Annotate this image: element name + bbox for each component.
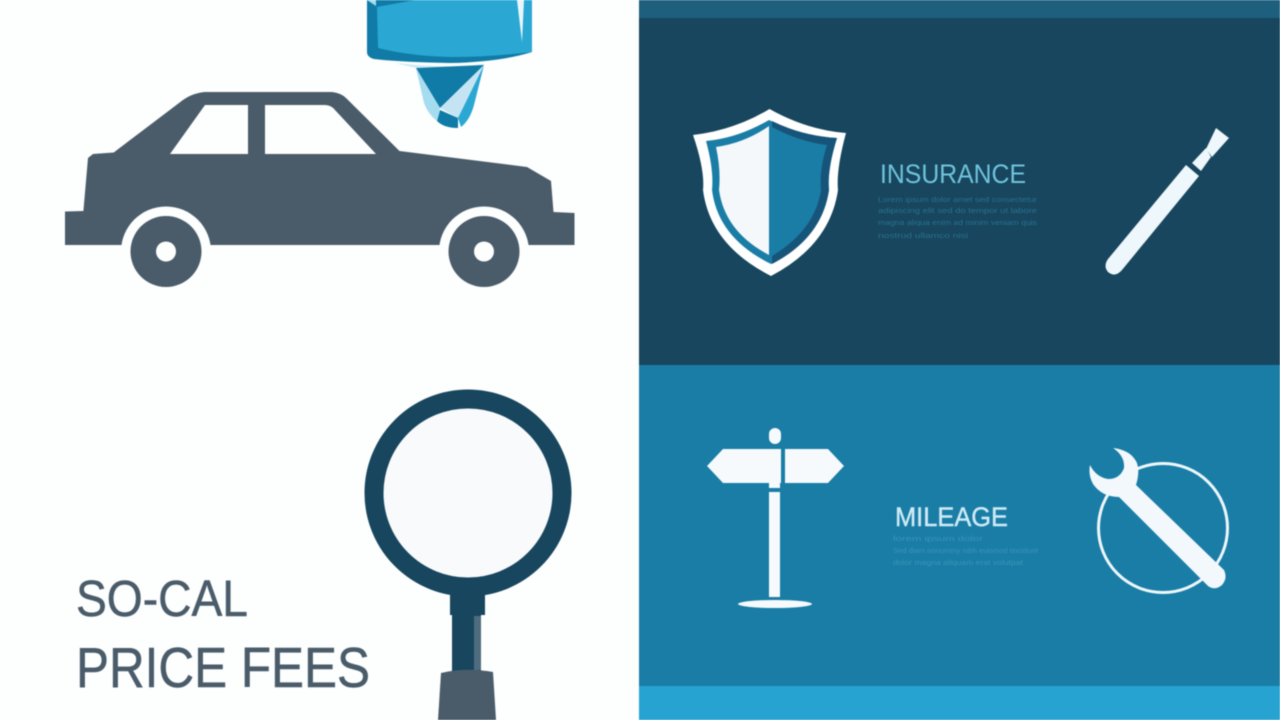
body text: nostrud ullamco nisi [878,233,969,240]
icon: magnifying glass [374,399,562,720]
body text: Lorem ipsum dolor amet sed consectetur [878,197,1038,204]
mileage text block [893,502,1038,567]
icon: signpost [707,428,844,608]
body text: magna aliqua enim ad minim veniam quis [878,220,1038,227]
rear window [170,105,248,154]
icon: car [65,92,574,296]
body text [878,197,1038,240]
front wheel [448,216,520,287]
icon: shield [693,109,846,276]
icon: pen tool [1106,128,1229,275]
heading: mileage: MILEAGE [895,502,1008,532]
panel: top strip [639,0,1280,18]
insurance text block [878,159,1038,240]
body text: adipiscing elit sed do tempor ut labore [878,208,1037,215]
panel: mileage [639,365,1280,686]
title line 1: SO-CAL [76,570,248,627]
heading: insurance: INSURANCE [880,159,1026,189]
icon: wrench in circle [1089,448,1228,592]
front window [265,105,376,154]
panel: left white [0,0,639,720]
body text [893,536,1038,567]
rear wheel arch [121,206,211,296]
panel: bottom strip [639,686,1280,720]
icon: blue gem pen nib [367,0,532,128]
panel: insurance [639,18,1280,365]
title line 2: PRICE FEES [76,636,370,700]
body text: dolor magna aliquam erat volutpat [893,560,1023,567]
title [76,570,370,700]
rear wheel [130,216,202,287]
body text: lorem ipsum dolor [893,536,984,543]
front wheel arch [439,206,529,296]
front hub [474,242,494,262]
body text: Sed diam nonummy nibh euismod tincidunt [893,548,1038,555]
rear hub [156,242,176,262]
